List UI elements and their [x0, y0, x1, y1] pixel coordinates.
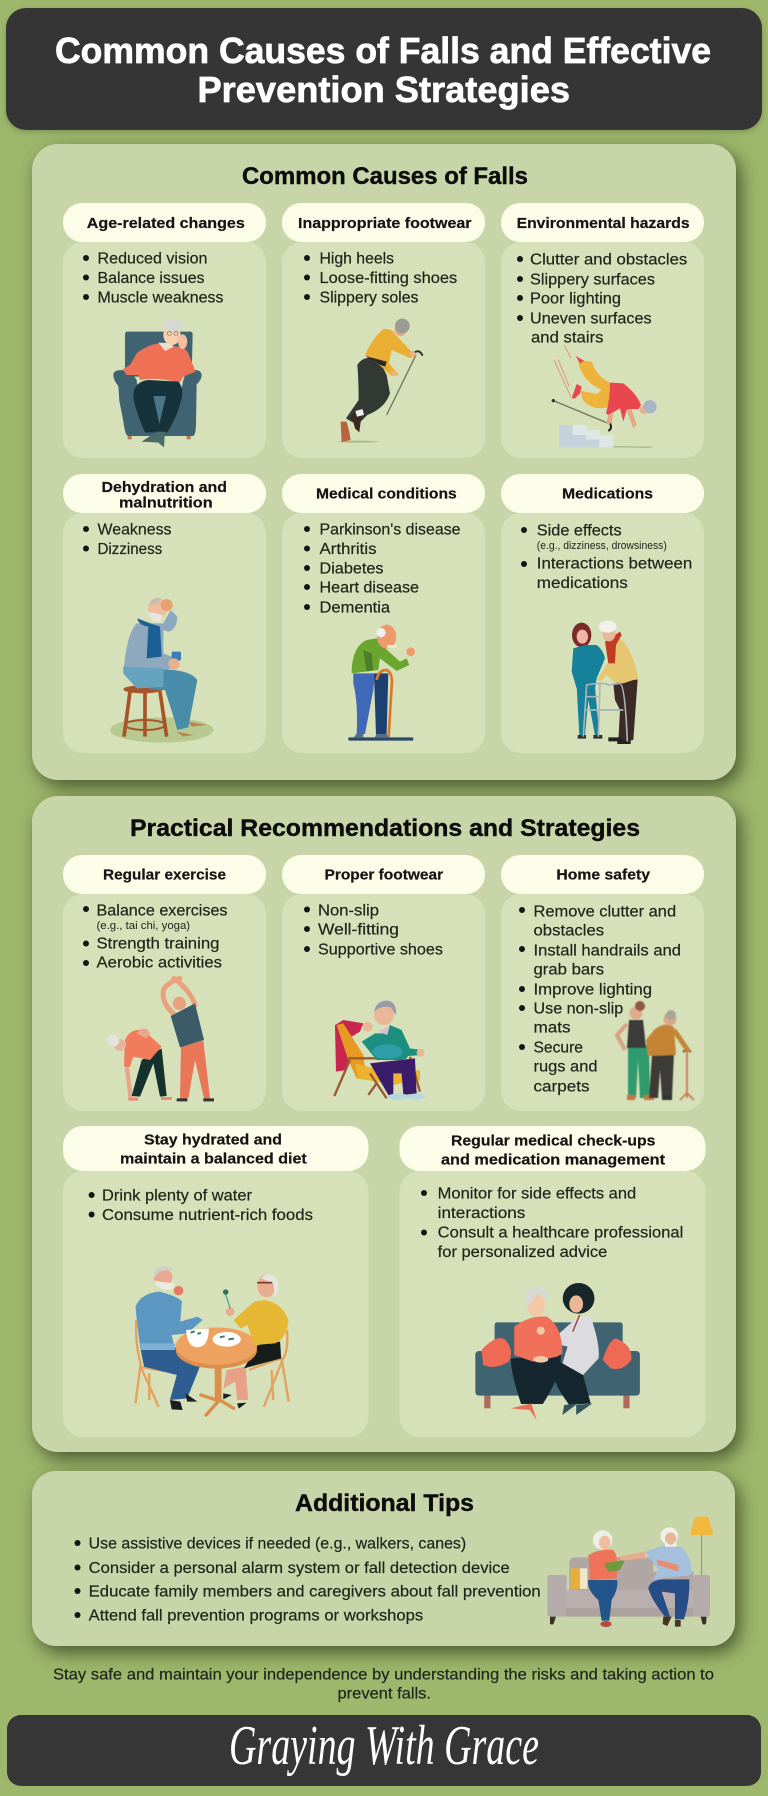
card: medications: Interactions between — [537, 556, 692, 572]
card: inappropriate footwear — [282, 203, 485, 458]
card: age-related changes: Reduced vision — [98, 250, 208, 268]
list: additional tips — [74, 1536, 541, 1624]
card: home safety: Home safety — [556, 868, 650, 884]
icon: seniors stretching — [107, 978, 214, 1101]
card: home safety: grab bars — [534, 962, 604, 978]
card: stay hydrated: Consume nutrient-rich foods — [102, 1207, 313, 1224]
card: medical conditions: Heart disease — [320, 580, 419, 596]
card: stay hydrated: Stay hydrated and — [144, 1132, 282, 1148]
title banner — [6, 8, 762, 130]
card: inappropriate footwear: High heels — [320, 250, 394, 268]
card: regular exercise: Aerobic activities — [96, 954, 222, 972]
panel: additional tips — [32, 1471, 735, 1646]
icon: stooped man with walking stick — [348, 625, 415, 741]
card: regular exercise: Balance exercises — [96, 902, 228, 920]
card: medications: Side effects — [537, 522, 622, 540]
card: regular exercise: Regular exercise — [103, 868, 226, 884]
title banner: Prevention Strategies — [198, 69, 570, 110]
card: medications: medications — [537, 575, 628, 592]
card: medical conditions: Medical conditions — [316, 486, 457, 502]
closing statement: prevent falls. — [338, 1686, 431, 1702]
card: stay hydrated — [63, 1126, 368, 1437]
heading: practical recommendations and strategies: Practical Recommendations and Strategies — [130, 815, 640, 842]
card: medical conditions: Diabetes — [320, 560, 384, 578]
card: age-related changes — [63, 203, 266, 458]
card: stay hydrated: maintain a balanced diet — [120, 1152, 307, 1168]
card: dehydration and malnutrition: Dizziness — [98, 541, 162, 558]
card: medications: (e.g., dizziness, drowsiness) — [537, 540, 667, 552]
card: medical check-ups: interactions — [438, 1205, 526, 1222]
card: environmental hazards: Uneven surfaces — [530, 310, 652, 328]
card: home safety: Install handrails and — [534, 942, 681, 960]
closing statement: Stay safe and maintain your independence by understanding the risks and taking action to — [53, 1666, 714, 1684]
card: medical conditions — [282, 474, 485, 753]
card: medical check-ups: Regular medical check-ups — [451, 1134, 655, 1150]
footer banner — [7, 1715, 761, 1786]
heading: additional tips: Additional Tips — [295, 1490, 474, 1517]
card: inappropriate footwear: Inappropriate footwear — [298, 216, 472, 232]
card: home safety: Remove clutter and — [534, 904, 676, 920]
card: inappropriate footwear: Slippery soles — [320, 290, 419, 306]
card: regular exercise: (e.g., tai chi, yoga) — [96, 920, 190, 932]
card: home safety: obstacles — [534, 922, 604, 940]
panel: practical recommendations — [32, 796, 736, 1452]
card: medical check-ups — [400, 1126, 706, 1437]
icon: man slipping with cane — [338, 319, 423, 443]
card: dehydration and malnutrition: Weakness — [98, 522, 172, 538]
card: age-related changes: Muscle weakness — [98, 290, 224, 306]
card: proper footwear: Non-slip — [318, 902, 379, 920]
card: environmental hazards — [501, 203, 704, 458]
card: age-related changes: Age-related changes — [87, 216, 245, 232]
card: environmental hazards: Clutter and obstacles — [530, 252, 688, 268]
icon: man resting in armchair — [113, 319, 202, 447]
card: regular exercise — [63, 855, 266, 1111]
closing statement — [53, 1666, 714, 1702]
card: medical conditions: Parkinson's disease — [320, 522, 460, 538]
panel: common causes of falls — [32, 144, 736, 780]
card: stay hydrated: Drink plenty of water — [102, 1188, 252, 1204]
card: environmental hazards: Slippery surfaces — [530, 272, 655, 288]
card: dehydration and malnutrition: Dehydration and — [102, 480, 227, 496]
icon: woman waving in armchair — [334, 1001, 425, 1100]
list: additional tips: Educate family members and caregivers about fall prevention — [89, 1584, 541, 1600]
card: medical check-ups: and medication management — [441, 1152, 665, 1168]
card: medical check-ups: for personalized advice — [438, 1244, 607, 1261]
list: additional tips: Use assistive devices if needed (e.g., walkers, canes) — [89, 1536, 466, 1552]
card: inappropriate footwear: Loose-fitting shoes — [320, 270, 457, 287]
card: medical check-ups: Monitor for side effects and — [438, 1186, 636, 1202]
card: home safety: Use non-slip — [534, 1000, 623, 1018]
card: medical conditions: Arthritis — [320, 541, 377, 558]
icon: couple eating at table — [135, 1266, 289, 1415]
icon: couple walking with cane — [617, 1001, 694, 1100]
card: dehydration and malnutrition: malnutrition — [119, 496, 213, 512]
list: additional tips: Attend fall prevention programs or workshops — [89, 1608, 423, 1624]
card: home safety: Secure — [534, 1040, 583, 1056]
card: proper footwear — [282, 855, 485, 1111]
card: proper footwear: Supportive shoes — [318, 942, 443, 958]
card: home safety: rugs and — [534, 1058, 598, 1076]
card: home safety: mats — [534, 1020, 571, 1036]
card: medical check-ups: Consult a healthcare professional — [438, 1224, 683, 1242]
card: environmental hazards: Poor lighting — [530, 290, 621, 308]
card: medical conditions: Dementia — [320, 600, 390, 616]
icon: couple reading on sofa — [547, 1517, 713, 1627]
icon: doctor with patient on sofa — [475, 1283, 640, 1420]
list: additional tips: Consider a personal alarm system or fall detection device — [89, 1560, 510, 1577]
card: age-related changes: Balance issues — [98, 270, 205, 287]
heading: common causes of falls: Common Causes of Falls — [242, 163, 528, 190]
card: medications — [501, 474, 704, 753]
card: regular exercise: Strength training — [96, 936, 220, 952]
title banner: Common Causes of Falls and Effective — [55, 30, 711, 71]
icon: dizzy man on stool — [110, 598, 213, 743]
card: home safety: carpets — [534, 1078, 590, 1096]
card: dehydration and malnutrition — [63, 474, 266, 753]
card: environmental hazards: Environmental hazards — [517, 216, 690, 232]
card: proper footwear: Proper footwear — [324, 868, 443, 884]
card: proper footwear: Well-fitting — [318, 922, 399, 938]
card: medications: Medications — [562, 486, 653, 502]
footer banner: Graying With Grace — [229, 1715, 539, 1777]
card: environmental hazards: and stairs — [531, 330, 604, 346]
icon: nurse helping man with walker — [572, 621, 638, 744]
card: home safety — [501, 855, 704, 1111]
icon: person falling over stairs — [552, 345, 657, 447]
card: home safety: Improve lighting — [534, 982, 652, 998]
